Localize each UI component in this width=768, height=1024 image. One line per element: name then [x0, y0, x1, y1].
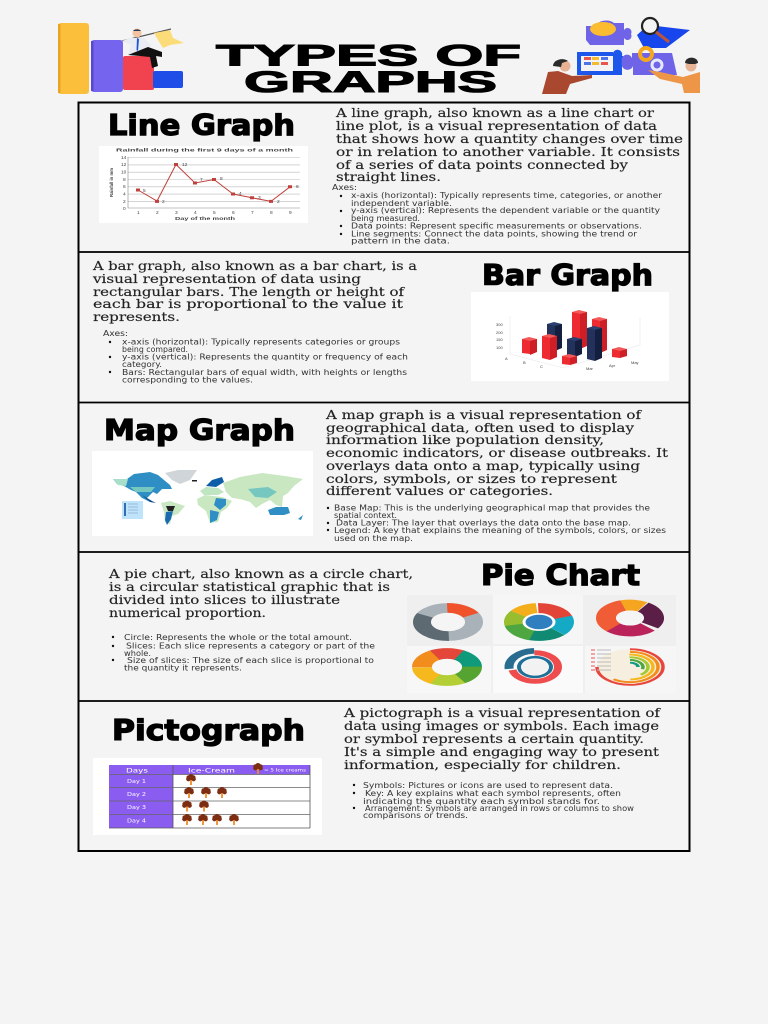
text: map graph description: A map graph is a visual representation of — [325, 408, 643, 422]
list: line graph axes: being measured. — [351, 214, 420, 223]
list: pictograph parts: Symbols: Pictures or icons are used to represent data. — [363, 781, 613, 790]
text: line graph description: line plot, is a visual representation of data — [336, 119, 657, 133]
list: pictograph parts: indicating the quantity each symbol stands for. — [363, 797, 600, 806]
text: line graph description — [335, 106, 683, 184]
text: map graph description: overlays data onto a map, typically using — [326, 459, 640, 473]
text: line graph description: straight lines. — [336, 170, 441, 184]
chart: rainfall line chart: Rainfall during the first 9 days of a month — [116, 148, 293, 154]
chart: rainfall line chart: Rainfall in mm — [109, 168, 115, 197]
chart: rainfall line chart: 12 — [121, 162, 127, 168]
text: pie chart description — [108, 567, 413, 620]
chart: rainfall line chart: 2 — [123, 199, 126, 205]
chart: rainfall line chart: 1 — [137, 210, 140, 216]
chart: 3D bar chart: A — [505, 356, 508, 361]
chart: 3D bar chart: 150 — [496, 337, 503, 342]
chart: rainfall line chart: 8 — [220, 176, 223, 182]
list: pie chart parts: Size of slices: The size of each slice is proportional to — [127, 656, 374, 665]
text: map graph description: colors, symbols, or sizes to represent — [326, 472, 617, 486]
chart: rainfall line chart: 9 — [289, 210, 292, 216]
chart: 3D bar chart — [471, 292, 669, 381]
chart: 3D bar chart: B — [523, 360, 526, 365]
list: pie chart parts: whole. — [124, 649, 151, 658]
text: map graph description: information like population density, — [326, 433, 604, 447]
text: map graph description — [325, 408, 668, 498]
chart: ice-cream pictograph table — [93, 758, 322, 835]
list: bar graph axes: category. — [122, 360, 162, 369]
chart: ice-cream pictograph table: Day 3 — [127, 805, 146, 811]
panel: pictograph — [93, 706, 662, 835]
chart: ice-cream pictograph table: = 5 Ice creams — [264, 768, 306, 772]
heading: map graph: Map Graph — [104, 414, 295, 447]
panel: frame — [78, 102, 690, 851]
list: bar graph axes: y-axis (vertical): Represents the quantity or frequency of each — [122, 352, 408, 362]
title — [216, 40, 521, 99]
list: line graph axes: independent variable. — [351, 199, 452, 208]
text: pictograph description: A pictograph is a visual representation of — [343, 706, 662, 720]
chart: rainfall line chart: 5 — [213, 210, 216, 216]
list: pictograph parts: comparisons or trends. — [363, 811, 468, 820]
chart: rainfall line chart: 6 — [232, 210, 235, 216]
chart: rainfall line chart — [99, 146, 308, 223]
list: line graph axes — [332, 183, 663, 246]
text: pictograph description: information, especially for children. — [344, 758, 621, 772]
list: line graph axes: Data points: Represent specific measurements or observations. — [351, 222, 642, 230]
panel: bar graph — [92, 259, 669, 384]
text: map graph description: economic indicators, or disease outbreaks. It — [326, 446, 668, 460]
list: map graph components: Data Layer: The layer that overlays the data onto the base map. — [336, 518, 631, 528]
chart: rainfall line chart: 4 — [239, 191, 242, 197]
list: map graph components: Base Map: This is the underlying geographical map that provides the — [334, 504, 650, 512]
chart: ice-cream pictograph table: Day 4 — [127, 818, 146, 824]
chart: rainfall line chart: 4 — [194, 210, 197, 216]
panel: pie chart — [108, 559, 676, 693]
chart: ice-cream pictograph table: Day 2 — [127, 792, 146, 798]
chart: ice-cream pictograph table: Days — [126, 768, 148, 774]
chart: rainfall line chart: 3 — [258, 195, 261, 201]
title: TYPES OF — [216, 40, 521, 72]
heading: line graph: Line Graph — [108, 109, 295, 142]
chart: rainfall line chart: 12 — [182, 162, 188, 168]
list: bar graph axes: Bars: Rectangular bars of equal width, with heights or lengths — [122, 368, 407, 377]
chart: 3D bar chart: Apr — [609, 363, 616, 368]
icon: bar chart with man holding flag — [58, 23, 184, 94]
list: map graph components: Legend: A key that explains the meaning of the symbols, colors, or sizes — [334, 526, 666, 535]
chart: rainfall line chart: 5 — [143, 188, 146, 194]
chart: 3D bar chart: C — [540, 364, 543, 369]
chart: 3D bar chart: 100 — [496, 345, 503, 350]
panel: map graph — [92, 408, 668, 543]
text: bar graph description: rectangular bars. The length or height of — [93, 285, 406, 299]
bars — [522, 310, 627, 365]
text: bar graph description: A bar graph, also known as a bar chart, is a — [92, 259, 417, 273]
chart: 3D bar chart: 200 — [496, 330, 503, 335]
text: line graph description: of a series of data points connected by — [336, 158, 628, 172]
list: pie chart parts: Circle: Represents the whole or the total amount. — [124, 633, 352, 642]
list: pie chart parts: Slices: Each slice represents a category or part of the — [126, 642, 375, 650]
icon: people assembling puzzle — [542, 18, 700, 94]
chart: rainfall line chart: 14 — [121, 155, 127, 161]
list: pictograph parts: Key: A key explains what each symbol represents, often — [365, 789, 621, 798]
list: pictograph parts: Arrangement: Symbols are arranged in rows or columns to show — [365, 804, 634, 813]
panel: line graph — [99, 106, 683, 246]
chart: rainfall line chart: 3 — [175, 210, 178, 216]
chart: rainfall line chart: 2 — [156, 210, 159, 216]
text: line graph description: that shows how a quantity changes over time — [336, 132, 683, 146]
chart: rainfall line chart: 2 — [277, 199, 280, 205]
text: pictograph description: or symbol represents a certain quantity. — [344, 732, 644, 746]
list: bar graph axes: x-axis (horizontal): Typically represents categories or groups — [122, 338, 400, 346]
heading: bar graph: Bar Graph — [482, 259, 653, 292]
heading: pie chart: Pie Chart — [481, 559, 640, 592]
chart: 3D bar chart: May — [631, 360, 639, 365]
list: map graph components — [327, 504, 666, 543]
chart: rainfall line chart: Day of the month — [175, 216, 235, 222]
list: pie chart parts: the quantity it represents. — [124, 664, 242, 672]
list: map graph components: spatial context. — [334, 511, 397, 520]
chart: rainfall line chart: 8 — [270, 210, 273, 216]
text: pictograph description: data using images or symbols. Each image — [344, 719, 659, 733]
text: bar graph description: represents. — [93, 310, 180, 324]
text: pie chart description: A pie chart, also known as a circle chart, — [108, 567, 413, 581]
chart: rainfall line chart: 8 — [123, 177, 126, 183]
list: pictograph parts — [353, 781, 634, 820]
list: bar graph axes: Axes: — [103, 329, 128, 338]
list: line graph axes: y-axis (vertical): Represents the dependent variable or the quantity — [351, 206, 661, 215]
chart: ice-cream pictograph table: Ice-Cream — [188, 768, 235, 774]
chart: ice-cream pictograph table: Day 1 — [127, 779, 146, 785]
chart: rainfall line chart: 7 — [200, 177, 203, 183]
text: bar graph description: each bar is proportional to the value it — [93, 297, 403, 311]
text: pie chart description: numerical proportion. — [109, 606, 266, 620]
list: map graph components: used on the map. — [334, 534, 413, 543]
heading: pictograph: Pictograph — [112, 714, 305, 747]
list: line graph axes: Axes: — [332, 183, 357, 192]
text: pictograph description — [343, 706, 662, 772]
chart: six pie chart samples — [407, 595, 676, 693]
chart: rainfall line chart: 2 — [162, 199, 165, 205]
title: GRAPHS — [244, 66, 497, 99]
text: map graph description: geographical data, often used to display — [326, 421, 634, 435]
list: bar graph axes: being compared. — [122, 345, 188, 354]
chart: 3D bar chart: 300 — [496, 322, 503, 327]
chart: rainfall line chart: 0 — [123, 206, 126, 212]
text: pie chart description: divided into slices to illustrate — [109, 593, 340, 607]
text: map graph description: different values or categories. — [326, 484, 553, 498]
text: pictograph description: It's a simple and engaging way to present — [344, 745, 659, 759]
chart: rainfall line chart: 7 — [251, 210, 254, 216]
list: line graph axes: x-axis (horizontal): Typically represents time, categories, or another — [351, 191, 663, 200]
list: bar graph axes — [103, 329, 408, 384]
text: pie chart description: is a circular statistical graphic that is — [109, 580, 390, 594]
list: line graph axes: pattern in the data. — [351, 236, 450, 246]
list: line graph axes: Line segments: Connect the data points, showing the trend or — [351, 230, 638, 238]
list: pie chart parts — [112, 633, 375, 672]
chart: rainfall line chart: 4 — [123, 192, 126, 198]
text: line graph description: or in relation to another variable. It consists — [336, 145, 680, 159]
text: line graph description: A line graph, also known as a line chart or — [335, 106, 654, 120]
chart: rainfall line chart: 10 — [121, 170, 127, 176]
chart: 3D bar chart: Mar — [586, 366, 594, 371]
text: bar graph description — [92, 259, 417, 324]
chart: world choropleth map — [92, 451, 313, 536]
chart: rainfall line chart: 6 — [296, 184, 299, 190]
text: bar graph description: visual representation of data using — [92, 272, 361, 286]
list: bar graph axes: corresponding to the values. — [122, 376, 253, 384]
chart: rainfall line chart: 6 — [123, 184, 126, 190]
